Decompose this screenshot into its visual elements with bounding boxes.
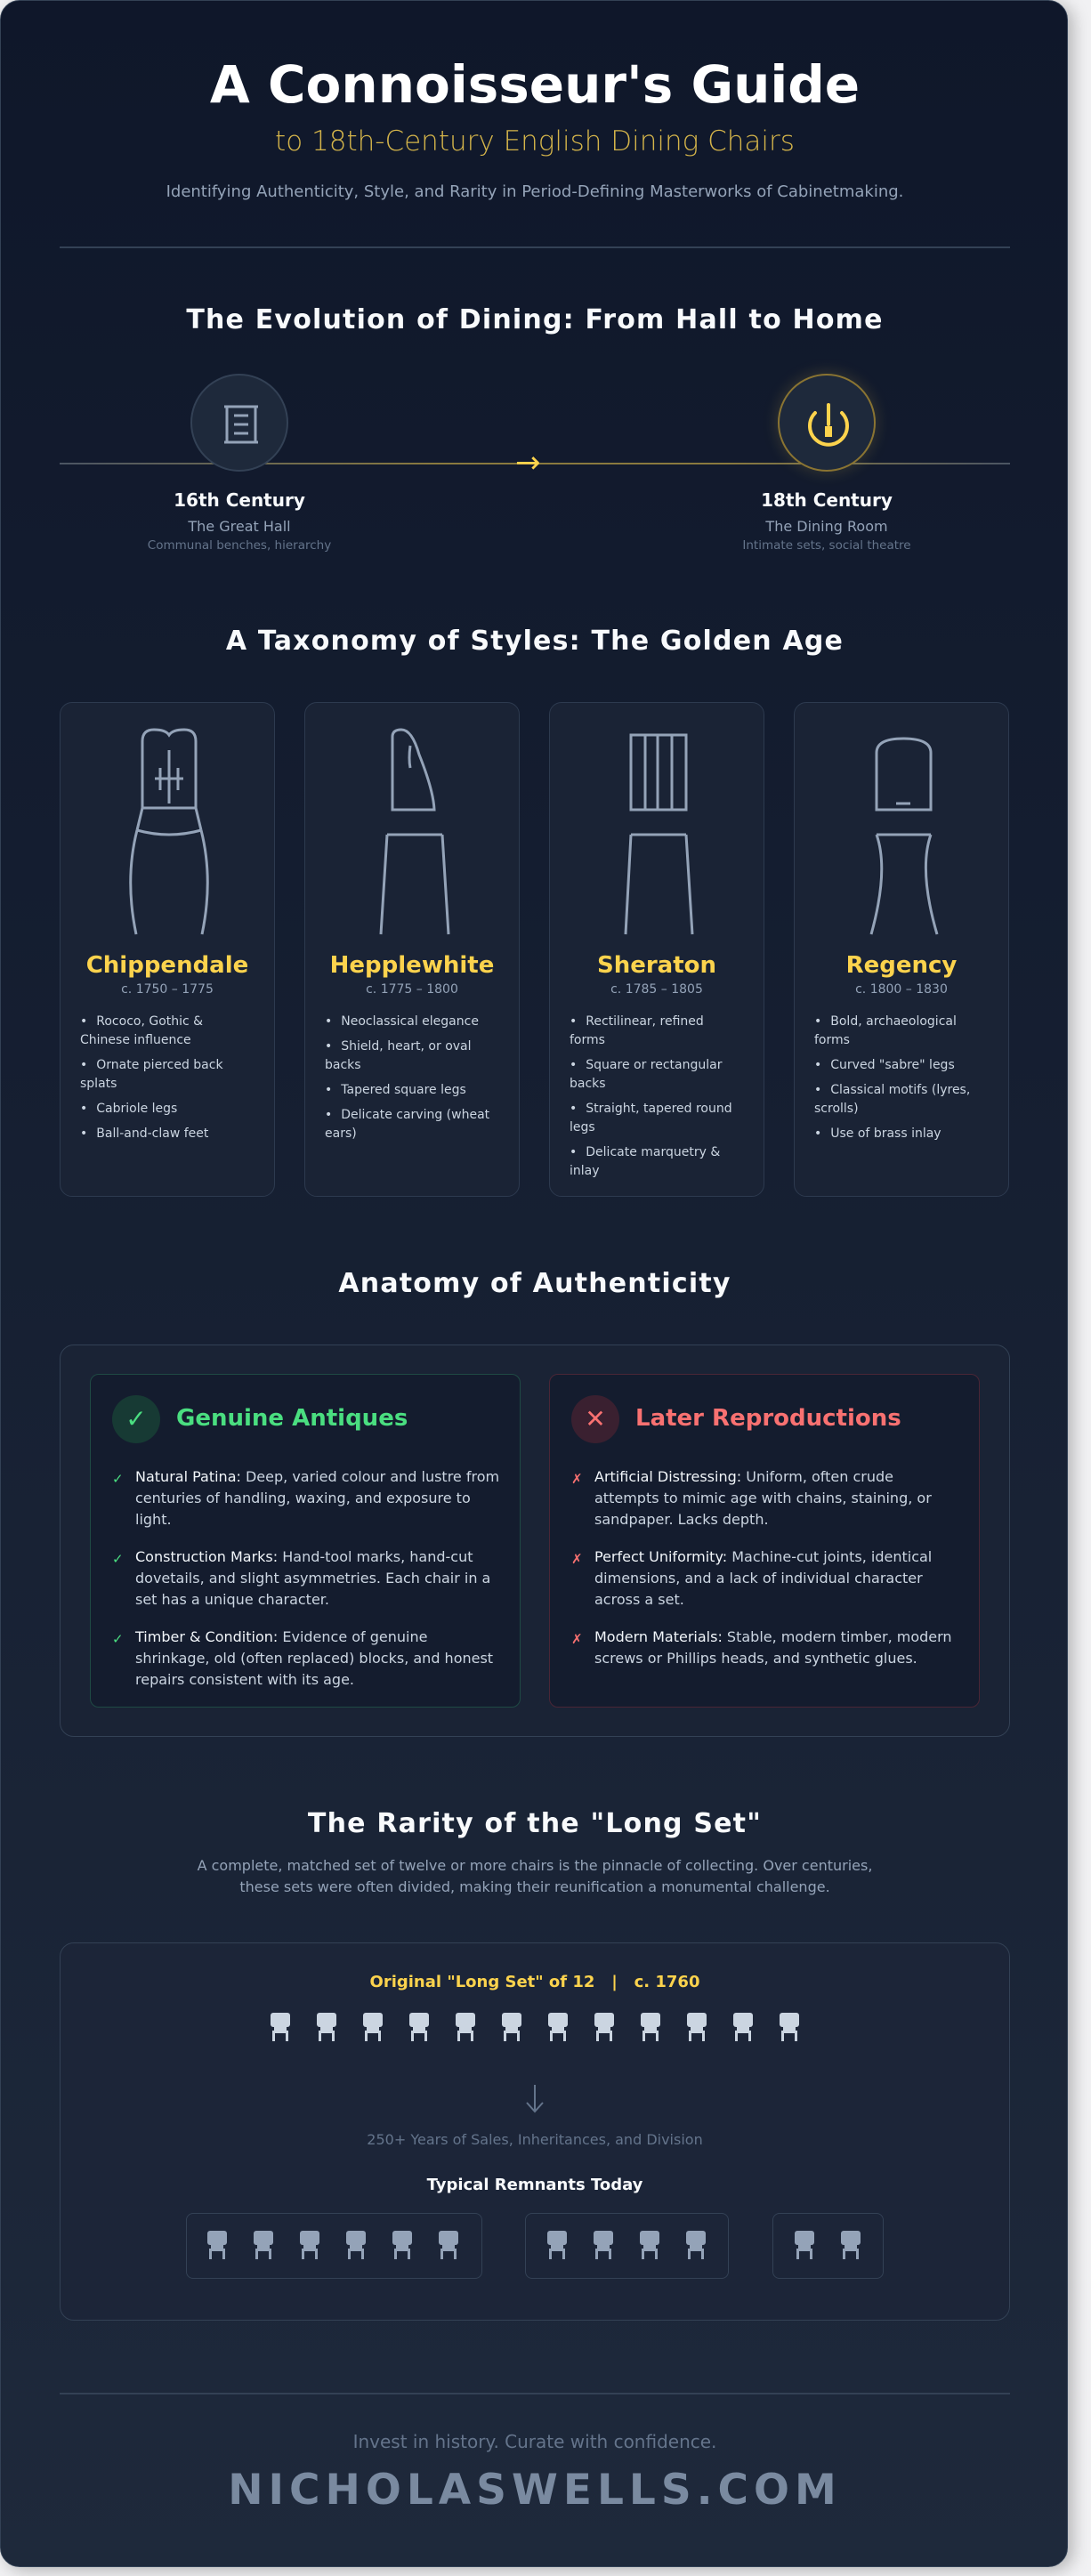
chart: 12 chairs bbox=[271, 2013, 799, 2041]
arrow: down bbox=[526, 2085, 544, 2112]
panel: sheraton: Delicate marquetry & inlay bbox=[570, 1145, 720, 1178]
text: rarity description bbox=[198, 1857, 872, 1895]
label: 18th century bbox=[742, 489, 911, 553]
footer brand: NICHOLASWELLS.COM bbox=[228, 2466, 842, 2515]
panel: regency: Use of brass inlay bbox=[830, 1126, 941, 1141]
footer tagline: Invest in history. Curate with confidence. bbox=[353, 2431, 716, 2452]
panel: hepplewhite: Tapered square legs bbox=[341, 1083, 466, 1097]
panel: genuine antiques: Genuine Antiques bbox=[176, 1405, 408, 1432]
panel: regency bbox=[794, 702, 1009, 1197]
panel: regency: Regency bbox=[846, 952, 957, 979]
label: original set: Original "Long Set" of 12 | c. 1760 bbox=[370, 1973, 699, 1991]
label: 16th century: The Great Hall bbox=[188, 518, 291, 535]
panel: genuine antiques: Natural Patina: Deep, varied colour and lustre from centuries of handling, waxing, and exposure to light. bbox=[135, 1468, 499, 1528]
remnant: set of 2 bbox=[772, 2213, 884, 2279]
panel: genuine antiques: ✓ bbox=[112, 1551, 124, 1567]
panel: sheraton: c. 1785 – 1805 bbox=[610, 982, 703, 997]
chart: remnant chairs bbox=[207, 2231, 861, 2259]
heading: evolution: The Evolution of Dining: From Hall to Home bbox=[186, 304, 884, 335]
panel: later reproductions: ✗ bbox=[571, 1551, 583, 1567]
panel: regency: Curved "sabre" legs bbox=[830, 1058, 955, 1072]
panel: genuine antiques bbox=[90, 1374, 521, 1708]
panel: later reproductions: Modern Materials: Stable, modern timber, modern screws or Phillips heads, and synthetic glues. bbox=[594, 1628, 952, 1667]
label: 18th century: 18th Century bbox=[761, 489, 893, 511]
icon: regency chair bbox=[870, 737, 938, 934]
text: division: 250+ Years of Sales, Inheritances, and Division bbox=[367, 2131, 703, 2148]
tagline: Identifying Authenticity, Style, and Rarity in Period-Defining Masterworks of Cabinetmaking. bbox=[166, 182, 903, 201]
panel: chippendale: Cabriole legs bbox=[96, 1102, 177, 1116]
panel: regency: Classical motifs (lyres, scrolls) bbox=[814, 1083, 970, 1116]
panel: authenticity bbox=[60, 1345, 1010, 1737]
icon: check: ✓ bbox=[125, 1404, 147, 1433]
panel: sheraton bbox=[549, 702, 764, 1197]
icon: dining room bbox=[778, 374, 876, 472]
panel: sheraton: Rectilinear, refined forms bbox=[570, 1014, 704, 1047]
title: A Connoisseur's Guide bbox=[210, 54, 860, 115]
icon: check bbox=[112, 1395, 160, 1443]
label: 16th century: Communal benches, hierarchy bbox=[148, 538, 331, 553]
panel: later reproductions: ✗ bbox=[571, 1471, 583, 1487]
panel: long set bbox=[60, 1942, 1010, 2321]
icon: sheraton chair bbox=[625, 733, 694, 934]
panel: later reproductions: Artificial Distressing: Uniform, often crude attempts to mimic age with chains, staining, or sandpaper. Lacks depth. bbox=[594, 1468, 932, 1528]
panel: hepplewhite: Shield, heart, or oval backs bbox=[325, 1039, 472, 1072]
label: 16th century: 16th Century bbox=[174, 489, 305, 511]
text: rarity description: these sets were often divided, making their reunification a monumental challenge. bbox=[239, 1878, 830, 1895]
label: 18th century: The Dining Room bbox=[765, 518, 888, 535]
icon: great hall bbox=[190, 374, 288, 472]
text: rarity description: A complete, matched set of twelve or more chairs is the pinnacle of collecting. Over centuries, bbox=[198, 1857, 872, 1874]
panel: sheraton: Straight, tapered round legs bbox=[570, 1102, 732, 1135]
panel: chippendale bbox=[60, 702, 275, 1197]
panel: genuine antiques: ✓ bbox=[112, 1631, 124, 1647]
panel: sheraton: Square or rectangular backs bbox=[570, 1058, 722, 1091]
subtitle: to 18th-Century English Dining Chairs bbox=[275, 125, 795, 157]
label: 18th century: Intimate sets, social theatre bbox=[742, 538, 911, 553]
panel: hepplewhite: c. 1775 – 1800 bbox=[366, 982, 458, 997]
panel: later reproductions: ✗ bbox=[571, 1631, 583, 1647]
heading: anatomy: Anatomy of Authenticity bbox=[338, 1268, 731, 1299]
panel: chippendale: Rococo, Gothic & Chinese influence bbox=[80, 1014, 203, 1047]
panel: chippendale: Ball-and-claw feet bbox=[96, 1126, 208, 1141]
label: 16th century bbox=[148, 489, 331, 553]
icon: cross: ✕ bbox=[585, 1404, 606, 1433]
icon: chippendale chair bbox=[129, 728, 209, 934]
panel: sheraton: Sheraton bbox=[597, 952, 716, 979]
panel: regency: c. 1800 – 1830 bbox=[855, 982, 948, 997]
panel: later reproductions: Later Reproductions bbox=[635, 1405, 901, 1432]
panel: regency: Bold, archaeological forms bbox=[814, 1014, 957, 1047]
heading: taxonomy: A Taxonomy of Styles: The Golden Age bbox=[226, 626, 844, 657]
panel: later reproductions: Perfect Uniformity: Machine-cut joints, identical dimensions, and a lack of individual character across a set. bbox=[594, 1548, 932, 1608]
timeline bbox=[60, 368, 1010, 553]
label: remnants: Typical Remnants Today bbox=[427, 2176, 642, 2194]
icon: cross bbox=[571, 1395, 619, 1443]
arrow: → bbox=[515, 445, 541, 480]
panel: hepplewhite: Neoclassical elegance bbox=[341, 1014, 479, 1029]
panel: chippendale: Ornate pierced back splats bbox=[80, 1058, 223, 1091]
remnant: set of 4 bbox=[525, 2213, 729, 2279]
icon: hepplewhite chair bbox=[379, 728, 450, 934]
panel: genuine antiques: Construction Marks: Hand-tool marks, hand-cut dovetails, and slight asymmetries. Each chair in a set has a unique character. bbox=[135, 1548, 490, 1608]
panel: genuine antiques: ✓ bbox=[112, 1471, 124, 1487]
panel: hepplewhite: Delicate carving (wheat ears) bbox=[325, 1108, 489, 1141]
panel: chippendale: Chippendale bbox=[86, 952, 248, 979]
panel: hepplewhite bbox=[304, 702, 520, 1197]
remnant: set of 6 bbox=[186, 2213, 482, 2279]
panel: hepplewhite: Hepplewhite bbox=[330, 952, 494, 979]
panel: genuine antiques: Timber & Condition: Evidence of genuine shrinkage, old (often replaced) blocks, and honest repairs consistent with its age. bbox=[135, 1628, 493, 1688]
panel: later reproductions bbox=[549, 1374, 980, 1708]
heading: rarity: The Rarity of the "Long Set" bbox=[308, 1808, 762, 1839]
panel: chippendale: c. 1750 – 1775 bbox=[121, 982, 214, 997]
